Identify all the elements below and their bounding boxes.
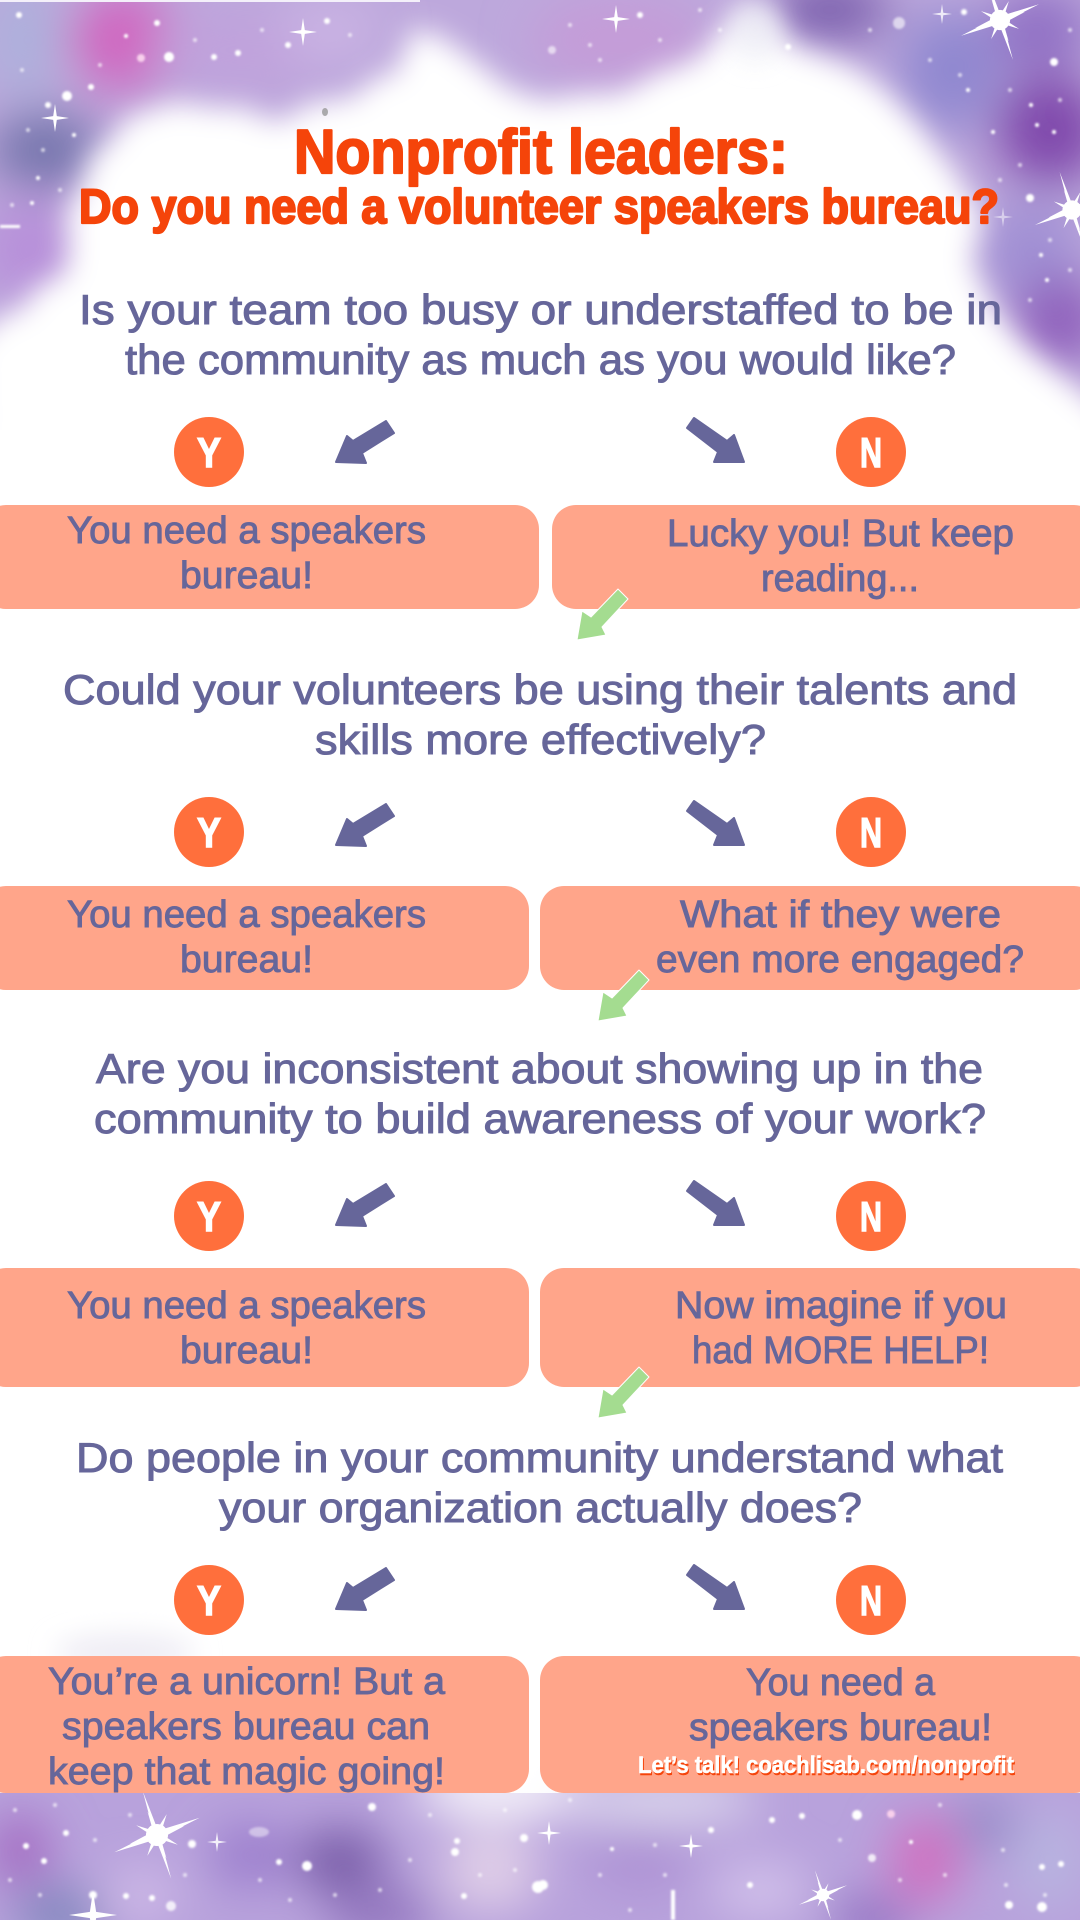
- background: galaxy bottom band: [0, 1765, 1080, 1920]
- no badge: [836, 797, 906, 867]
- panel: question 1: [0, 286, 1080, 640]
- call to action link: Let’s talk! coachlisab.com/nonprofit: [638, 1752, 1014, 1779]
- question text: the community as much as you would like?: [125, 336, 956, 383]
- yes answer box: keep that magic going!: [48, 1751, 445, 1793]
- no answer box: Now imagine if you: [675, 1285, 1007, 1327]
- yes badge: Y: [197, 809, 221, 856]
- question text: [79, 286, 1002, 383]
- yes badge: Y: [197, 1193, 221, 1240]
- yes badge: Y: [197, 429, 221, 476]
- arrow: down-left to yes: [336, 1568, 394, 1610]
- no answer box: reading...: [761, 558, 919, 600]
- question text: community to build awareness of your work?: [94, 1095, 986, 1142]
- yes answer box: You need a speakers: [67, 894, 426, 936]
- no answer box: You need a: [746, 1662, 936, 1704]
- arrow: green continue: [577, 589, 628, 640]
- heading line 1: Nonprofit leaders:: [294, 118, 788, 187]
- no badge: [836, 417, 906, 487]
- yes answer box: You need a speakers: [67, 1285, 426, 1327]
- panel: question 4: [0, 1434, 1080, 1793]
- arrow: down-left to yes: [336, 421, 394, 463]
- arrow: down-right to no: [687, 418, 744, 462]
- title: [79, 118, 999, 234]
- arrow: down-right to no: [687, 1565, 744, 1609]
- question text: Do people in your community understand what: [76, 1434, 1003, 1481]
- no answer box: What if they were: [680, 894, 1001, 936]
- question text: [63, 666, 1017, 763]
- yes answer box: bureau!: [180, 1330, 313, 1372]
- arrow: down-left to yes: [336, 1184, 394, 1226]
- arrow: down-left to yes: [336, 804, 394, 846]
- call to action link: Let’s talk! coachlisab.com/nonprofit: [639, 1754, 1015, 1781]
- question text: Are you inconsistent about showing up in the: [96, 1045, 983, 1092]
- no answer box: had MORE HELP!: [692, 1330, 989, 1372]
- yes badge: [174, 797, 244, 867]
- arrow: down-right to no: [687, 801, 744, 845]
- yes answer box: bureau!: [180, 939, 313, 981]
- question text: your organization actually does?: [219, 1484, 862, 1531]
- no answer box: speakers bureau!: [689, 1707, 992, 1749]
- no answer box: [540, 1656, 1080, 1793]
- yes answer box: You’re a unicorn! But a: [48, 1661, 446, 1703]
- yes answer box: [0, 886, 529, 990]
- yes badge: Y: [197, 1577, 221, 1624]
- no badge: [836, 1565, 906, 1635]
- yes badge: [174, 417, 244, 487]
- no badge: [836, 1181, 906, 1251]
- background: galaxy top band: [0, 0, 1080, 430]
- arrow: green continue: [598, 970, 649, 1021]
- background: stars top: [0, 0, 1080, 302]
- question text: Is your team too busy or understaffed to be in: [79, 286, 1002, 333]
- yes answer box: bureau!: [180, 555, 313, 597]
- panel: question 3: [0, 1045, 1080, 1418]
- question text: Could your volunteers be using their talents and: [63, 666, 1017, 713]
- no answer box: [540, 886, 1080, 990]
- arrow: down-right to no: [687, 1181, 744, 1225]
- no answer box: Lucky you! But keep: [667, 513, 1014, 555]
- yes badge: [174, 1181, 244, 1251]
- yes answer box: [0, 1268, 529, 1387]
- yes answer box: [0, 505, 539, 609]
- no badge: N: [860, 1193, 882, 1240]
- panel: question 2: [0, 666, 1080, 1021]
- no answer box: [540, 1268, 1080, 1387]
- no answer box: even more engaged?: [656, 939, 1024, 981]
- yes badge: [174, 1565, 244, 1635]
- background: white cloud centre: [0, 0, 1080, 1000]
- arrow: green continue: [598, 1367, 649, 1418]
- no badge: N: [860, 809, 882, 856]
- background: stars bottom: [8, 1782, 1064, 1920]
- no badge: N: [860, 429, 882, 476]
- question text: skills more effectively?: [315, 716, 766, 763]
- yes answer box: You need a speakers: [67, 510, 426, 552]
- no answer box: [552, 505, 1080, 609]
- no badge: N: [860, 1577, 882, 1624]
- heading line 2: Do you need a volunteer speakers bureau?: [79, 181, 999, 234]
- yes answer box: [0, 1656, 529, 1793]
- question text: [94, 1045, 986, 1142]
- yes answer box: speakers bureau can: [62, 1706, 430, 1748]
- background: faint cloud left of the last box: [55, 1634, 195, 1670]
- question text: [76, 1434, 1003, 1531]
